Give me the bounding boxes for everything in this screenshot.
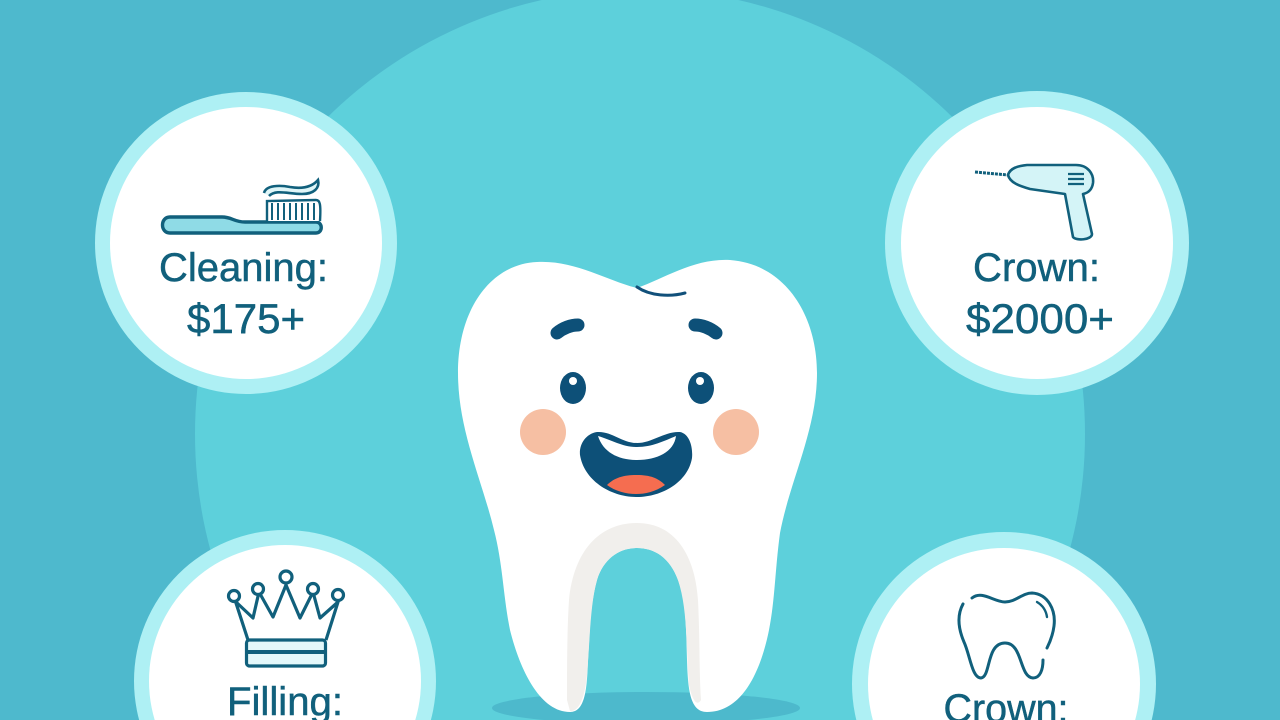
- tooth body: [458, 260, 817, 712]
- mouth: [580, 432, 692, 497]
- tooth mascot: [458, 260, 817, 712]
- icon: toothbrush: [162, 180, 321, 233]
- root arch shading: [567, 523, 701, 711]
- panel: cleaning: [95, 92, 397, 394]
- left cheek: [520, 409, 566, 455]
- label: crown price: Crown:: [973, 246, 1100, 290]
- crease line: [637, 287, 685, 295]
- icon: drill: [975, 165, 1093, 239]
- left eye: [560, 372, 586, 404]
- label: crown price: [966, 246, 1114, 342]
- label: cleaning price: [159, 246, 328, 342]
- label: crown price: $2000+: [966, 295, 1114, 342]
- background large circle: [195, 0, 1085, 720]
- icon: tooth outline: [959, 593, 1054, 678]
- panel: crown top right: [885, 91, 1189, 395]
- label: cleaning price: Cleaning:: [159, 246, 328, 290]
- panel: crown bottom right: [852, 532, 1156, 720]
- left eyebrow: [557, 325, 578, 333]
- right eye: [688, 372, 714, 404]
- panel: filling: [134, 530, 436, 720]
- tooth shadow: [492, 692, 800, 720]
- right cheek: [713, 409, 759, 455]
- icon: crown: [228, 571, 344, 666]
- label: cleaning price: $175+: [187, 295, 305, 342]
- right eyebrow: [695, 325, 716, 333]
